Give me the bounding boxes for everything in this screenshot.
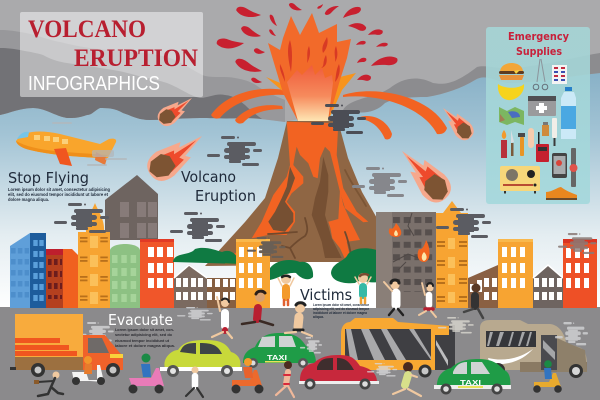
- person: child teal: [355, 273, 371, 303]
- building: grey tall: [105, 175, 158, 240]
- icon: medicine bottle: [542, 122, 549, 136]
- person: boy yellow shirt: [393, 362, 421, 396]
- person: woman running: [212, 297, 232, 338]
- red car: [299, 355, 379, 390]
- volcano: [205, 121, 400, 266]
- buildings right and trees: [173, 201, 597, 308]
- panel heading: [508, 30, 569, 58]
- title: volcano: VOLCANO: [28, 16, 146, 43]
- building: red brown: [46, 249, 78, 308]
- bus: [341, 318, 456, 378]
- evacuate heading and text: Lorem ipsum dolor sit amet, con-: [115, 327, 175, 332]
- heading and text: victims: Lorem ipsum dolor sit amet, consectetur: [313, 303, 369, 307]
- building: orange centre: [236, 239, 270, 308]
- small house brown right: [468, 265, 498, 308]
- mountain: [205, 121, 400, 266]
- heading and text: stop flying: elit, sed do eiusmod tempor incididunt ut labore et: [8, 192, 108, 197]
- icon: walkie talkie: [536, 132, 549, 162]
- camper smoke: [555, 322, 588, 345]
- lava arcs: [211, 89, 447, 139]
- lava drops: [216, 2, 398, 85]
- bus smoke: [438, 317, 474, 334]
- heading and text: stop flying: Stop Flying: [8, 169, 89, 187]
- person: businessman: [34, 372, 63, 396]
- icon: banana: [498, 84, 524, 100]
- lava flows: [225, 122, 368, 264]
- icon: fire on building 2: [418, 240, 430, 262]
- trees and smoke ground: [173, 248, 377, 308]
- heading: volcano eruption: Volcano: [181, 168, 236, 186]
- emergency supplies panel: [486, 27, 590, 204]
- icon: bandage: [528, 128, 534, 148]
- yellow scooter: [533, 360, 562, 393]
- green taxi 2: TAXI: [460, 378, 481, 387]
- person: man red shirt: [242, 291, 273, 325]
- icon: scissors: [533, 59, 548, 90]
- icon: radio: [500, 166, 540, 194]
- cracks: [268, 170, 366, 258]
- evacuate heading and text: sectetur adipisicing elit, sed do: [115, 332, 173, 337]
- icon: phone: [552, 153, 567, 178]
- icon: pills: [552, 65, 567, 84]
- sky background: [0, 60, 600, 310]
- person: woman red skirt: [419, 283, 436, 317]
- icon: burger: [499, 63, 524, 80]
- evacuate heading and text: labore et dolore magna aliqua.: [115, 343, 175, 348]
- heading and text: stop flying: Lorem ipsum dolor sit amet, consectetur adipisicing: [8, 187, 110, 192]
- plane smoke: [52, 122, 127, 166]
- title: eruption: ERUPTION: [74, 45, 198, 72]
- green taxi 2: [434, 359, 511, 394]
- icon: knife: [511, 130, 514, 156]
- person: shirtless man: [285, 303, 312, 336]
- eruption flames: [266, 13, 356, 121]
- icon: shoe: [546, 187, 577, 200]
- small house brown: [207, 278, 236, 308]
- white scooter: [72, 356, 105, 385]
- icon: lighter: [501, 130, 507, 158]
- road: [0, 307, 600, 400]
- delivery truck: [10, 314, 123, 377]
- small house grey: [174, 264, 207, 308]
- small house grey right: [533, 265, 563, 308]
- evacuate heading and text: Evacuate: [108, 311, 173, 329]
- panel heading: Emergency: [508, 30, 569, 43]
- building: blue: [10, 233, 46, 308]
- heading and text: victims: [300, 286, 369, 319]
- heading: volcano eruption: [181, 168, 256, 205]
- yellow car: [160, 340, 242, 377]
- person: man arms up: [384, 280, 403, 315]
- building: green: [110, 244, 140, 308]
- person: bearded man: [464, 284, 483, 318]
- title: infographics: INFOGRAPHICS: [28, 73, 160, 95]
- icon: thermometer: [552, 118, 557, 146]
- person: man white: [186, 366, 203, 397]
- person: child orange: [278, 274, 294, 305]
- taxi smoke: [300, 337, 322, 354]
- panel heading: Supplies: [516, 45, 562, 58]
- building: orange right: [498, 239, 533, 308]
- heading and text: victims: Victims: [300, 286, 352, 304]
- building: orange right tall: [436, 201, 468, 308]
- red car smoke: [367, 363, 397, 376]
- heading and text: stop flying: dolore magna aliqua.: [8, 197, 49, 202]
- green taxi: [243, 333, 316, 368]
- people running: [34, 273, 483, 397]
- green taxi: TAXI: [267, 355, 287, 362]
- heading and text: stop flying: [8, 169, 110, 202]
- title panel: [20, 12, 203, 97]
- building: orange tall: [78, 203, 110, 308]
- building: red right: [563, 239, 597, 308]
- icon: water bottle: [561, 87, 576, 139]
- icon: first aid kit: [528, 96, 556, 116]
- icon: flashlight: [518, 133, 525, 156]
- damaged grey building: [376, 212, 436, 308]
- evacuate heading and text: [108, 311, 175, 348]
- icon: map: [499, 107, 524, 125]
- airplane: [16, 132, 116, 166]
- meteors: [142, 91, 477, 208]
- pink scooter: [128, 354, 164, 394]
- dark lava rock: [268, 157, 342, 258]
- building: red orange: [140, 239, 174, 308]
- buildings left group: [10, 175, 174, 308]
- icon: fire on building: [389, 223, 401, 237]
- grey clouds: [0, 0, 600, 122]
- heading and text: victims: adipisicing elit, sed do eiusmod tempor: [313, 307, 369, 311]
- orange scooter: [232, 358, 264, 394]
- smoke puffs: [54, 104, 596, 342]
- scooters: [72, 354, 562, 394]
- icon: watch: [570, 148, 578, 187]
- heading and text: victims: aliqua.: [313, 315, 324, 319]
- heading: volcano eruption: Eruption: [195, 187, 256, 205]
- camper van: [480, 320, 587, 378]
- evacuate heading and text: eiusmod tempor incididunt ut: [115, 338, 170, 343]
- person: bikini woman: [276, 361, 294, 397]
- heading and text: victims: incididunt ut labore et dolore magna: [313, 311, 368, 315]
